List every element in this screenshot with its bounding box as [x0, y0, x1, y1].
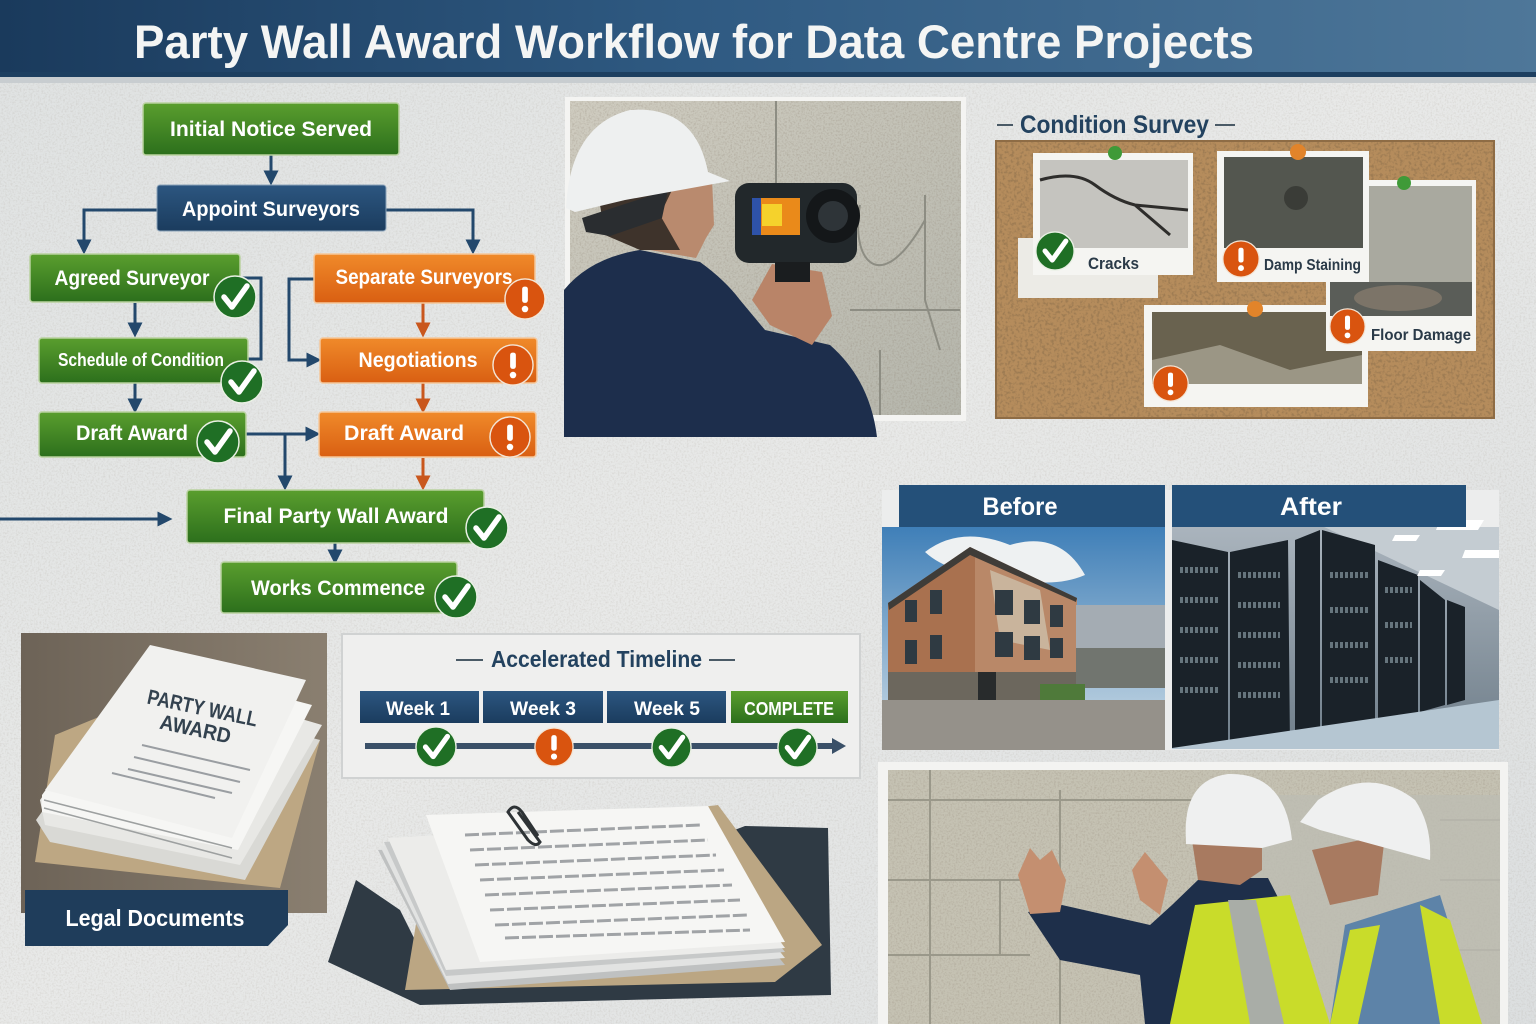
- label: After: After: [1280, 493, 1342, 521]
- photo card: Floor Damage: Floor Damage: [1371, 327, 1471, 344]
- step: Week 1: [360, 691, 479, 767]
- step: Week 3: Week 3: [510, 699, 576, 720]
- timeline arrow: [365, 738, 846, 754]
- box: Works Commence: Works Commence: [251, 577, 425, 600]
- photo card: Cracks: [1033, 146, 1193, 275]
- photo: before building: [882, 527, 1165, 750]
- worker head: [600, 178, 714, 258]
- box: Draft Award (separate): Draft Award: [344, 422, 464, 445]
- box: Negotiations: [320, 338, 537, 385]
- worker helmet: [566, 110, 730, 212]
- box: Schedule of Condition: [39, 338, 263, 403]
- corkboard panel: [996, 141, 1494, 418]
- header banner: [0, 0, 1536, 83]
- photo card: Damp Staining: Damp Staining: [1264, 257, 1361, 274]
- label: Before: Before: [982, 493, 1058, 521]
- box: Draft Award (agreed): [39, 412, 246, 463]
- label: Before: [899, 485, 1165, 527]
- worker right: [1330, 895, 1480, 1024]
- box: Agreed Surveyor: [30, 254, 256, 318]
- photo: legal document stack: AWARD: [158, 711, 233, 748]
- thermal camera: [735, 183, 857, 263]
- heading: Condition Survey: Condition Survey: [1020, 111, 1209, 139]
- box: Initial Notice Served: Initial Notice Served: [170, 118, 372, 141]
- box: Separate Surveyors: [314, 254, 545, 319]
- panel: accelerated timeline: [342, 634, 860, 778]
- box: Final Party Wall Award: Final Party Wall Award: [224, 505, 448, 528]
- step: COMPLETE: [731, 691, 848, 767]
- worker hand: [752, 264, 832, 345]
- photo card: Floor Damage: [1326, 176, 1476, 351]
- box: Final Party Wall Award: [187, 490, 508, 549]
- box: Appoint Surveyors: Appoint Surveyors: [182, 198, 360, 221]
- worker left: [1028, 878, 1305, 1024]
- photo card: Cracks: Cracks: [1088, 254, 1139, 273]
- label: Legal Documents: Legal Documents: [66, 905, 244, 931]
- label: Legal Documents: [25, 890, 288, 946]
- step: Week 5: Week 5: [634, 699, 700, 720]
- box: Separate Surveyors: Separate Surveyors: [336, 266, 512, 289]
- photo card: Damp Staining: [1217, 144, 1369, 282]
- box: Negotiations: Negotiations: [358, 349, 478, 372]
- photo: legal document stack: PARTY WALL: [145, 686, 260, 732]
- title: Party Wall Award Workflow for Data Centre Projects: [134, 15, 1254, 68]
- step: COMPLETE: COMPLETE: [744, 699, 834, 719]
- photo: paper stack with clip: [328, 805, 831, 1005]
- photo: after data hall: [1172, 520, 1499, 749]
- heading: Accelerated Timeline: Accelerated Timeline: [491, 646, 702, 672]
- step: Week 5: [607, 691, 726, 767]
- panel: before and after: [882, 485, 1499, 750]
- photo: thermal camera inspection: [564, 97, 966, 437]
- step: Week 3: [483, 691, 603, 766]
- box: Draft Award (agreed): Draft Award: [76, 422, 188, 445]
- box: Schedule of Condition: Schedule of Condition: [58, 350, 224, 370]
- box: Works Commence: [221, 562, 477, 618]
- box: Agreed Surveyor: Agreed Surveyor: [54, 267, 210, 290]
- box: Appoint Surveyors: [157, 185, 386, 231]
- flowchart connectors: [0, 155, 473, 560]
- photo: surveyors inspecting wall: [878, 762, 1508, 1024]
- photo card: wall damage: [1144, 301, 1368, 407]
- box: Draft Award (separate): [319, 412, 536, 457]
- step: Week 1: Week 1: [386, 699, 450, 720]
- worker jacket: [564, 250, 877, 437]
- box: Initial Notice Served: [143, 103, 399, 155]
- photo: legal document stack: [21, 633, 327, 913]
- label: After: [1172, 485, 1466, 527]
